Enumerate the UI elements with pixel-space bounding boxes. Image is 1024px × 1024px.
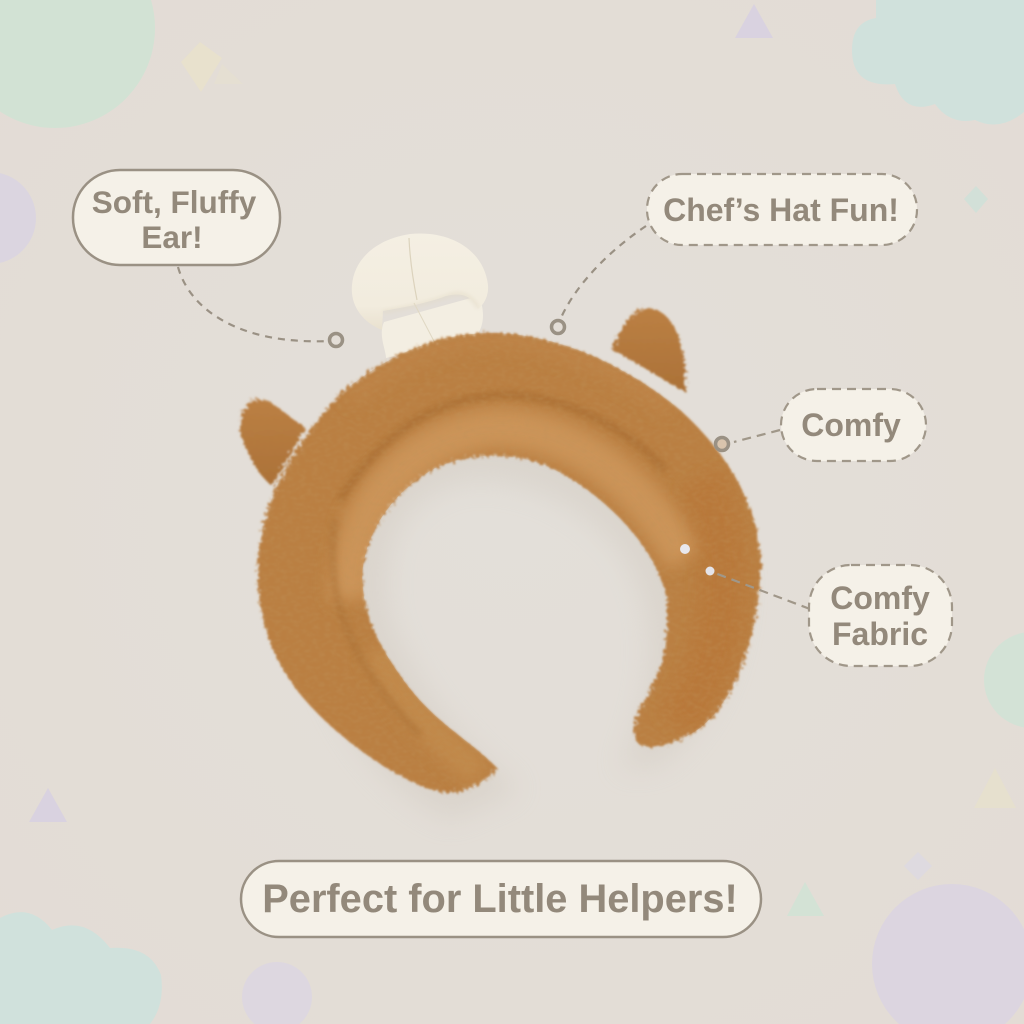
callout: soft fluffy ear: [73, 170, 280, 265]
callout: soft fluffy ear: Soft, Fluffy: [92, 184, 257, 220]
callout: chef's hat fun: [647, 174, 917, 245]
callout: comfy: Comfy: [801, 407, 901, 443]
connector: chef's hat: [552, 226, 646, 334]
callout: comfy fabric: Fabric: [832, 616, 928, 652]
callout: comfy fabric: [809, 565, 952, 666]
banner: perfect for little helpers: Perfect for Little Helpers!: [262, 877, 738, 921]
banner: perfect for little helpers: [241, 861, 761, 937]
pearl dots on band: [680, 544, 714, 576]
headband: [258, 333, 761, 793]
callout: chef's hat fun: Chef’s Hat Fun!: [663, 192, 899, 228]
callout: soft fluffy ear: Ear!: [141, 219, 203, 255]
ear: right: [612, 308, 685, 392]
chef hat: [352, 233, 488, 358]
connector: comfy fabric: [712, 572, 810, 609]
ear: left: [240, 400, 306, 486]
callout: comfy fabric: Comfy: [830, 580, 930, 616]
connector: soft fluffy ear: [178, 267, 342, 346]
connector: comfy: [716, 430, 780, 450]
headband shadow: [300, 400, 740, 820]
callout: comfy: [781, 389, 926, 461]
